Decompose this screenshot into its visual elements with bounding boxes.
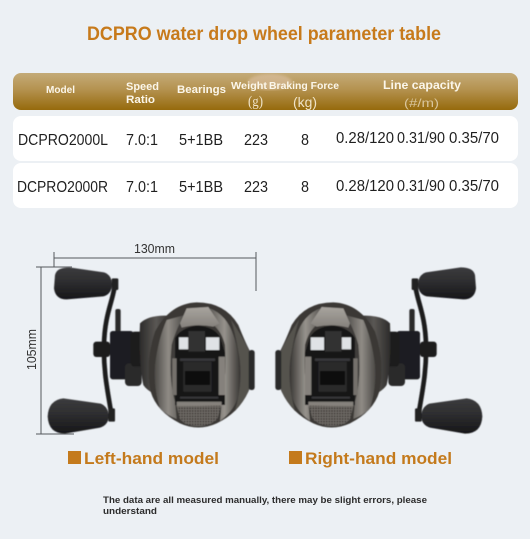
table row: DCPRO2000R	[13, 163, 518, 208]
table row: DCPRO2000L	[13, 116, 518, 161]
width dimension: 130mm: 130mm	[134, 241, 175, 256]
table header: Bearings	[177, 84, 226, 96]
product photo: left-hand reel	[48, 267, 255, 434]
table row: DCPRO2000L: 7.0:1	[126, 132, 158, 149]
table row: DCPRO2000L: 0.31/90	[397, 130, 445, 147]
table row: DCPRO2000L: DCPRO2000L	[18, 132, 108, 149]
caption: left-hand model: Left-hand model	[84, 450, 219, 468]
table header: Braking Force	[269, 80, 339, 92]
table header: Model	[46, 84, 75, 96]
height dimension: 105mm: 105mm	[24, 329, 39, 370]
table row: DCPRO2000L: 8	[301, 132, 309, 149]
table header: Weight	[231, 80, 268, 92]
table header: (g)	[248, 94, 263, 110]
width dimension: 130mm	[54, 241, 256, 291]
table row: DCPRO2000R: 7.0:1	[126, 179, 158, 196]
table row: DCPRO2000R: 0.35/70	[449, 178, 499, 195]
table row: DCPRO2000R: 0.31/90	[397, 178, 445, 195]
table header: (kg)	[293, 94, 317, 110]
footnote	[103, 495, 427, 517]
table row: DCPRO2000L: 5+1BB	[179, 132, 223, 149]
table header: (#/m)	[404, 96, 439, 110]
footnote: The data are all measured manually, there may be slight errors, please	[103, 495, 427, 506]
product photo: right-hand reel	[275, 267, 482, 434]
table header: Line capacity	[383, 78, 461, 92]
parameter table	[13, 73, 518, 208]
table row: DCPRO2000R: 5+1BB	[179, 179, 223, 196]
table row: DCPRO2000R: DCPRO2000R	[17, 179, 108, 196]
table row: DCPRO2000L: 0.35/70	[449, 130, 499, 147]
table header: Speed	[126, 81, 159, 93]
table row: DCPRO2000L: 223	[244, 132, 268, 149]
title: DCPRO water drop wheel parameter table	[87, 24, 441, 45]
table row: DCPRO2000R: 0.28/120	[336, 178, 394, 195]
table header: Ratio	[126, 94, 155, 106]
footnote: understand	[103, 506, 157, 517]
table row: DCPRO2000R: 8	[301, 179, 309, 196]
table header	[13, 73, 518, 110]
table row: DCPRO2000R: 223	[244, 179, 268, 196]
height dimension: 105mm	[24, 267, 74, 434]
caption: right-hand model: Right-hand model	[305, 450, 452, 468]
table row: DCPRO2000L: 0.28/120	[336, 130, 394, 147]
